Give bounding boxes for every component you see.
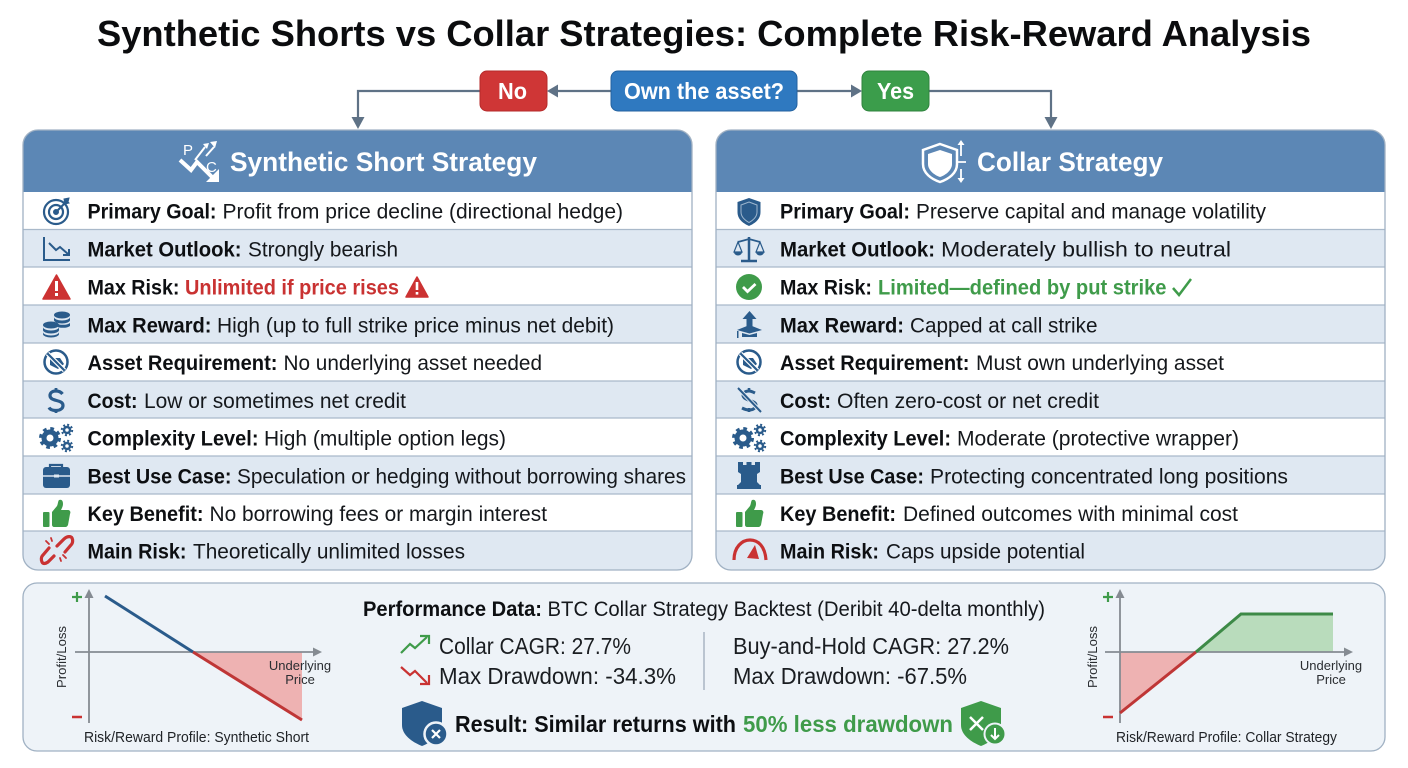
icon: shield with arrows [923,140,966,183]
icon: target [44,198,69,224]
row: complexity level [734,425,1239,451]
row: asset requirement: Asset Requirement: [88,352,278,375]
chart: collar risk/reward: Risk/Reward Profile: Collar Strategy [1116,730,1338,746]
panel header: collar [716,130,1385,192]
row: complexity level: Complexity Level: [88,428,258,450]
row: best use case [737,462,1288,489]
row: primary goal [738,198,1266,226]
row: max reward: Max Reward: [88,314,212,338]
row: asset requirement [738,350,1224,375]
row: primary goal [44,198,623,224]
arrow: No to synthetic short panel [352,91,480,129]
chart: collar risk/reward: Underlying [1300,658,1362,673]
row: main risk [734,540,1085,564]
row: market outlook [44,237,398,262]
zebra rows [716,230,1385,570]
row: key benefit: Defined outcomes with minimal cost [903,503,1238,526]
icon: gears [734,425,765,451]
icon: trend up [401,636,429,653]
button: Own the asset? [611,71,797,111]
row: best use case: Protecting concentrated long positions [930,466,1288,488]
icon: green shield [961,701,1006,746]
row: asset requirement: Asset Requirement: [780,352,970,375]
icon: gears [40,425,72,451]
row: market outlook: Market Outlook: [780,238,935,262]
row: best use case: Best Use Case: [780,466,924,488]
stats: collar: Max Drawdown: -34.3% [439,663,676,689]
decision flow [352,71,1058,129]
row: cost: Low or sometimes net credit [144,390,406,413]
chart: collar risk/reward: Price [1316,672,1346,687]
button: No: No [498,78,527,104]
row: best use case [43,465,686,488]
row: complexity level: Moderate (protective wrapper) [957,428,1239,450]
row: max risk [736,274,1191,300]
panel header: collar: Collar Strategy [977,147,1163,177]
icon: falling chart [44,237,70,260]
button: No [480,71,547,111]
row: cost: Cost: [780,390,831,413]
arrow: to No [547,84,611,98]
panel: performance data [23,583,1385,751]
icon: blue shield [402,701,448,746]
button: Yes [862,71,929,111]
row: main risk: Main Risk: [780,540,879,564]
chart: synthetic short risk/reward: Underlying [269,658,331,673]
title: Synthetic Shorts vs Collar Strategies: Complete Risk-Reward Analysis [97,13,1311,54]
icon: no asset [44,350,68,374]
row: market outlook: Market Outlook: [88,238,242,262]
row: complexity level: High (multiple option legs) [264,428,506,450]
chart: synthetic short risk/reward: Risk/Reward Profile: Synthetic Short [84,730,309,746]
button: Own the asset?: Own the asset? [624,78,784,104]
row: market outlook: Strongly bearish [248,238,398,262]
icon: briefcase [43,465,70,488]
row: cost: Cost: [88,390,138,413]
row: primary goal: Primary Goal: [780,200,910,224]
row: main risk: Caps upside potential [886,540,1085,564]
icon: thumbs up [43,500,70,527]
button: Yes: Yes [877,78,914,104]
chart: collar risk/reward: Profit/Loss [1085,626,1100,688]
icon: warning triangle [43,275,70,299]
row: main risk [41,537,465,564]
row: best use case: Speculation or hedging without borrowing shares [237,466,686,488]
panel: collar strategy [716,130,1385,570]
icon: synthetic position: P [183,142,193,159]
row: asset requirement [44,350,542,375]
row: max reward: High (up to full strike price minus net debit) [217,314,614,338]
row: max reward: Capped at call strike [910,314,1098,338]
row: market outlook: Moderately bullish to neutral [941,238,1231,262]
row: max risk: Max Risk: [780,276,872,300]
chart: synthetic short risk/reward: Price [285,672,315,687]
row: best use case: Best Use Case: [88,466,232,488]
row: key benefit: Key Benefit: [780,503,896,526]
icon: synthetic position [180,141,219,182]
panel header: synthetic short: Synthetic Short Strategy [230,147,537,177]
arrow: Yes to collar panel [929,91,1058,129]
row: max reward [43,312,614,338]
performance heading: Performance Data: [363,598,542,621]
row: asset requirement: Must own underlying asset [976,352,1224,375]
icon: coins [43,312,70,338]
row: max risk: Limited—defined by put strike [878,276,1166,300]
icon: trend down [401,667,429,684]
icon: synthetic position: C [206,159,217,176]
row: max risk [43,275,428,300]
row: complexity level [40,425,506,451]
row: cost [49,388,406,413]
row: main risk: Main Risk: [88,540,186,564]
row: max risk: Max Risk: [88,276,180,300]
stats: collar [401,633,676,689]
row: market outlook [734,237,1231,262]
icon: broken chain [41,537,73,564]
icon: green check [736,274,762,300]
stats: buy and hold: Max Drawdown: -67.5% [733,663,967,689]
performance heading: BTC Collar Strategy Backtest (Deribit 40-delta monthly) [548,598,1045,621]
row: cost: Often zero-cost or net credit [837,390,1099,413]
icon: shield [738,198,760,226]
panel header: synthetic short [23,130,692,192]
icon: inline warning [406,277,428,297]
icon: balance scales [734,237,764,261]
icon: no dollar [738,388,761,412]
row: key benefit [43,500,547,527]
row: main risk: Theoretically unlimited losses [193,540,465,564]
row: primary goal: Primary Goal: [88,200,216,224]
icon: no asset [738,350,760,374]
row: primary goal: Profit from price decline (directional hedge) [222,200,623,224]
icon: rook tower [737,462,761,489]
stats: buy and hold [733,633,1009,689]
chart: synthetic short risk/reward: Profit/Loss [54,626,69,688]
row: key benefit [736,500,1238,527]
icon: inline check [1173,279,1191,295]
result callout: 50% less drawdown [743,711,953,737]
stats: collar: Collar CAGR: 27.7% [439,633,631,659]
row: max risk: Unlimited if price rises [185,276,399,300]
icon: dollar [49,388,63,413]
arrow: to Yes [797,84,862,98]
chart: synthetic short risk/reward [54,589,331,746]
chart: collar risk/reward [1085,589,1362,746]
row: key benefit: Key Benefit: [88,503,204,526]
row: primary goal: Preserve capital and manage volatility [916,200,1266,224]
row: asset requirement: No underlying asset needed [284,352,542,375]
row: key benefit: No borrowing fees or margin interest [210,503,547,526]
stats: buy and hold: Buy-and-Hold CAGR: 27.2% [733,633,1009,659]
result callout: Result: Similar returns with [455,711,736,737]
zebra rows [23,230,692,570]
row: complexity level: Complexity Level: [780,428,951,450]
icon: thumbs up [736,500,763,527]
row: max reward [737,311,1098,338]
row: max reward: Max Reward: [780,314,904,338]
result callout [402,701,1006,746]
icon: gauge [734,540,766,560]
icon: capped upward arrow [737,311,762,338]
row: cost [738,388,1099,413]
panel: synthetic short strategy [23,130,692,570]
